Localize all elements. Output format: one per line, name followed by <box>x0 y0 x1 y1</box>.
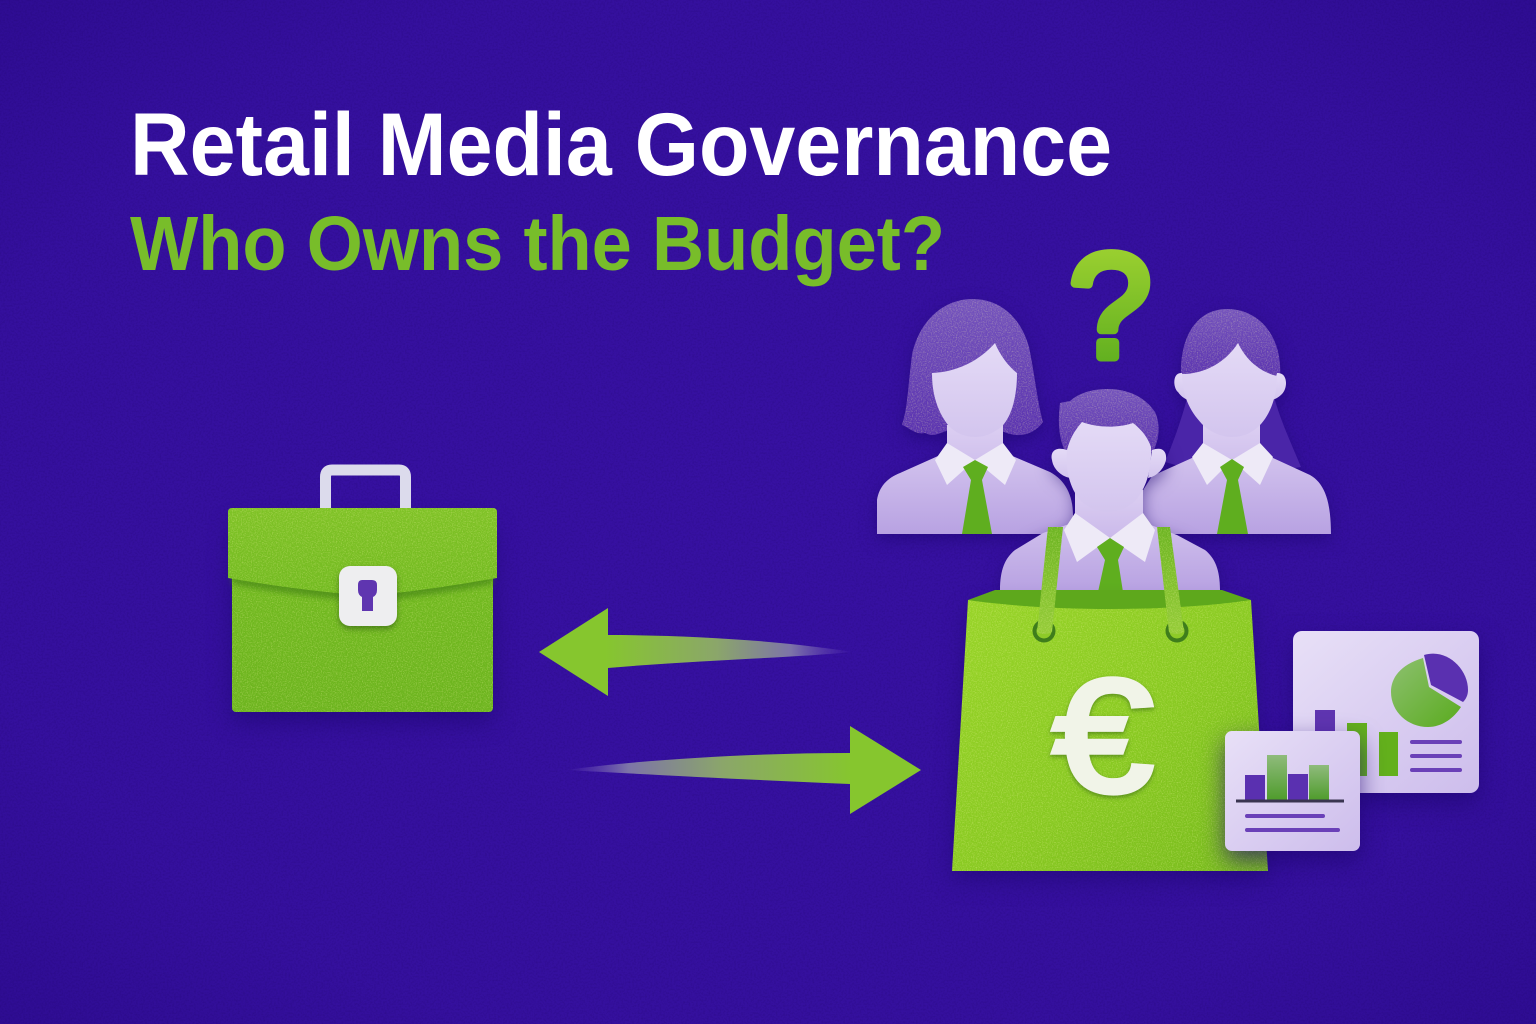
keyhole <box>358 580 377 611</box>
arrow: pointing left to briefcase <box>539 608 853 696</box>
briefcase handle <box>326 470 406 509</box>
face <box>1182 343 1277 437</box>
chart card: front report <box>1225 731 1360 851</box>
face <box>1067 422 1151 512</box>
icon: briefcase <box>228 470 497 722</box>
collar <box>1192 443 1273 485</box>
card background <box>1225 731 1360 851</box>
text lines <box>1247 816 1338 830</box>
torso <box>1000 490 1220 590</box>
briefcase flap <box>228 508 497 596</box>
collar <box>1064 513 1155 562</box>
person: centre man <box>1000 389 1220 592</box>
text lines <box>1412 742 1460 770</box>
pie chart <box>1391 654 1468 727</box>
bar chart <box>1315 710 1398 776</box>
left strap <box>1037 527 1063 634</box>
torso <box>1140 425 1331 534</box>
arrow: pointing right to shopping bag <box>565 726 921 814</box>
right ring <box>1168 622 1186 640</box>
ears <box>1052 449 1166 478</box>
title: Retail Media Governance <box>130 94 1112 194</box>
subtitle: Who Owns the Budget? <box>130 201 945 287</box>
icon: question mark: ? <box>1069 224 1151 389</box>
collar <box>935 443 1016 485</box>
briefcase shadow <box>232 525 493 722</box>
bar chart <box>1236 755 1344 802</box>
bag inner rim <box>968 590 1251 615</box>
chart card: back dashboard <box>1293 631 1479 793</box>
ears <box>1174 373 1286 400</box>
euro symbol: € <box>1053 646 1153 825</box>
hair <box>902 299 1043 435</box>
tie <box>962 460 992 534</box>
left ring <box>1034 622 1054 640</box>
long back hair <box>1165 393 1301 472</box>
person: left woman <box>877 299 1073 534</box>
bag body <box>952 600 1268 871</box>
bag shadow <box>952 610 1268 880</box>
briefcase lock <box>339 566 397 626</box>
tie <box>1217 459 1248 534</box>
card background <box>1293 631 1479 793</box>
hair cap <box>1181 309 1280 378</box>
icon: shopping bag <box>952 527 1268 880</box>
face <box>932 343 1017 437</box>
torso <box>877 425 1073 534</box>
briefcase body <box>232 512 493 712</box>
person: right woman <box>1140 309 1331 534</box>
flap shadow <box>232 570 493 602</box>
tie <box>1097 538 1124 592</box>
hair <box>1059 389 1159 452</box>
right strap <box>1157 527 1184 634</box>
